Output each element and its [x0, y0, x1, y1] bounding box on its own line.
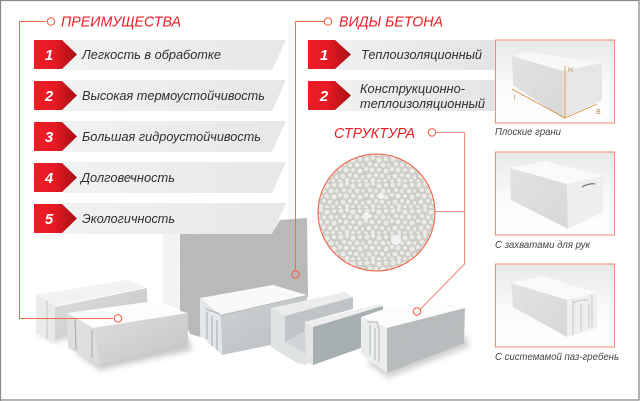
- heading: ВИДЫ БЕТОНА: ВИДЫ БЕТОНА: [339, 14, 443, 30]
- list item 4: [34, 162, 286, 193]
- product box: flat faces: H: [568, 67, 573, 74]
- type item 2: 2: [319, 88, 329, 105]
- list item 2: [34, 80, 286, 111]
- product box: hand grips: [496, 152, 614, 235]
- product photo: back flat block: [36, 280, 150, 342]
- type item 2: Конструкционно-: [360, 81, 466, 96]
- caption: tongue and groove: С системамой паз-гребень: [495, 351, 619, 363]
- list item 5: [34, 203, 286, 234]
- list item 3: [34, 121, 286, 152]
- caption: flat faces: Плоские грани: [495, 127, 561, 138]
- porous structure circle: [318, 154, 436, 272]
- list item 1: Легкость в обработке: [81, 47, 221, 62]
- list item 1: 1: [45, 47, 53, 64]
- list item 5: Экологичность: [82, 211, 175, 226]
- type item 2: [308, 80, 495, 111]
- product box: tongue and groove: [496, 264, 614, 347]
- type item 1: 1: [320, 47, 328, 64]
- product photo: large block: [361, 303, 470, 378]
- heading: ПРЕИМУЩЕСТВА: ПРЕИМУЩЕСТВА: [61, 14, 181, 30]
- product box: flat faces: [496, 40, 614, 123]
- structure connector: [413, 129, 464, 315]
- heading: СТРУКТУРА: СТРУКТУРА: [334, 126, 415, 142]
- list item 1: [34, 40, 286, 70]
- caption: hand grips: С захватами для рук: [495, 240, 591, 251]
- product box: flat faces: l: [514, 95, 516, 102]
- list item 5: 5: [45, 211, 54, 228]
- product photo: front grooved block: [67, 302, 192, 370]
- type item 1: [308, 40, 495, 70]
- product photo: U-shaped block: [271, 292, 383, 365]
- list item 3: Большая гидроустойчивость: [82, 129, 261, 144]
- product photo: tongue and groove block: [200, 285, 307, 355]
- type item 2: теплоизоляционный: [360, 96, 485, 111]
- heading frame: concrete types: [292, 18, 332, 278]
- type item 1: Теплоизоляционный: [361, 47, 482, 62]
- list item 4: 4: [44, 170, 54, 187]
- heading frame: advantages: [20, 18, 122, 322]
- product box: flat faces: B: [596, 109, 601, 116]
- list item 2: Высокая термоустойчивость: [82, 88, 265, 103]
- product photo: wall panel: [163, 218, 308, 337]
- list item 4: Долговечность: [79, 170, 175, 185]
- list item 3: 3: [45, 129, 54, 146]
- list item 2: 2: [44, 88, 54, 105]
